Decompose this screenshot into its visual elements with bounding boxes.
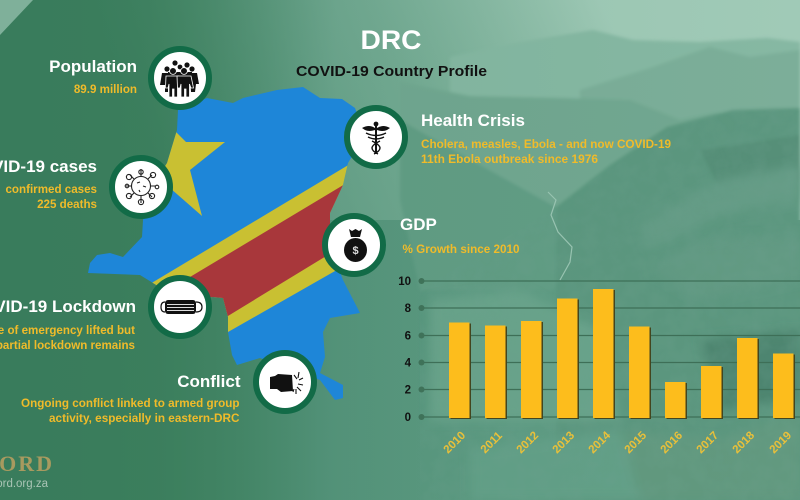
icon: money bag	[325, 216, 383, 274]
x axis year labels: 2013	[551, 430, 577, 456]
cases values: confirmed cases	[5, 183, 97, 196]
x axis year labels: 2014	[587, 429, 614, 456]
covid-19 cases block	[0, 157, 170, 216]
health crisis block	[347, 108, 672, 166]
flag: yellow star	[165, 132, 225, 216]
subtitle: COVID-19 Country Profile	[296, 64, 487, 80]
y axis gridlines and labels: 0	[405, 412, 411, 424]
x axis year labels: 2015	[623, 429, 650, 456]
x axis year labels: 2019	[768, 430, 794, 456]
health crisis block: 11th Ebola outbreak since 1976	[421, 153, 599, 166]
gdp label: GDP	[400, 215, 437, 234]
y axis gridlines and labels: 4	[405, 358, 412, 370]
covid-19 cases block: 225 deaths	[37, 198, 97, 211]
x axis year labels: 2018	[731, 429, 758, 456]
x axis year labels	[442, 429, 794, 456]
x axis year labels: 2017	[695, 430, 721, 456]
conflict label: Conflict	[177, 372, 241, 391]
lockdown block: partial lockdown remains	[0, 339, 135, 352]
conflict text: Ongoing conflict linked to armed group	[21, 397, 240, 410]
x axis year labels: 2011	[479, 429, 505, 456]
flag: yellow band	[152, 166, 348, 332]
bars	[449, 289, 795, 419]
logo: ACCORD	[0, 451, 54, 490]
x axis year labels: 2012	[515, 430, 541, 456]
population value: 89.9 million	[74, 83, 137, 96]
gdp subtitle: % Growth since 2010	[402, 243, 520, 256]
y axis gridlines and labels: 8	[405, 303, 412, 315]
icon: caduceus	[347, 108, 405, 166]
icon: fist	[256, 353, 314, 411]
y axis gridlines and labels: 6	[405, 330, 411, 342]
y axis gridlines and labels	[398, 276, 800, 424]
gdp block	[325, 215, 520, 274]
icon: money bag: $	[352, 245, 359, 257]
conflict block	[21, 353, 314, 425]
health crisis text: Cholera, measles, Ebola - and now COVID-19	[421, 138, 672, 151]
map: DRC in flag colours	[88, 87, 360, 400]
icon: people	[151, 49, 209, 107]
population label: Population	[49, 57, 137, 76]
icon: virus	[112, 158, 170, 216]
background: corner facet	[0, 0, 33, 35]
x axis year labels: 2016	[659, 430, 685, 456]
y axis gridlines and labels: 10	[398, 276, 411, 288]
bar chart: GDP growth	[398, 276, 800, 456]
health crisis label: Health Crisis	[421, 111, 525, 130]
conflict block: activity, especially in eastern-DRC	[49, 412, 240, 425]
population block	[49, 49, 209, 107]
x axis year labels: 2010	[442, 430, 468, 456]
lockdown block	[0, 278, 209, 352]
icon: face mask	[151, 278, 209, 336]
title: DRC	[360, 25, 422, 55]
flag: red band	[190, 185, 343, 316]
y axis gridlines and labels: 2	[405, 384, 411, 396]
